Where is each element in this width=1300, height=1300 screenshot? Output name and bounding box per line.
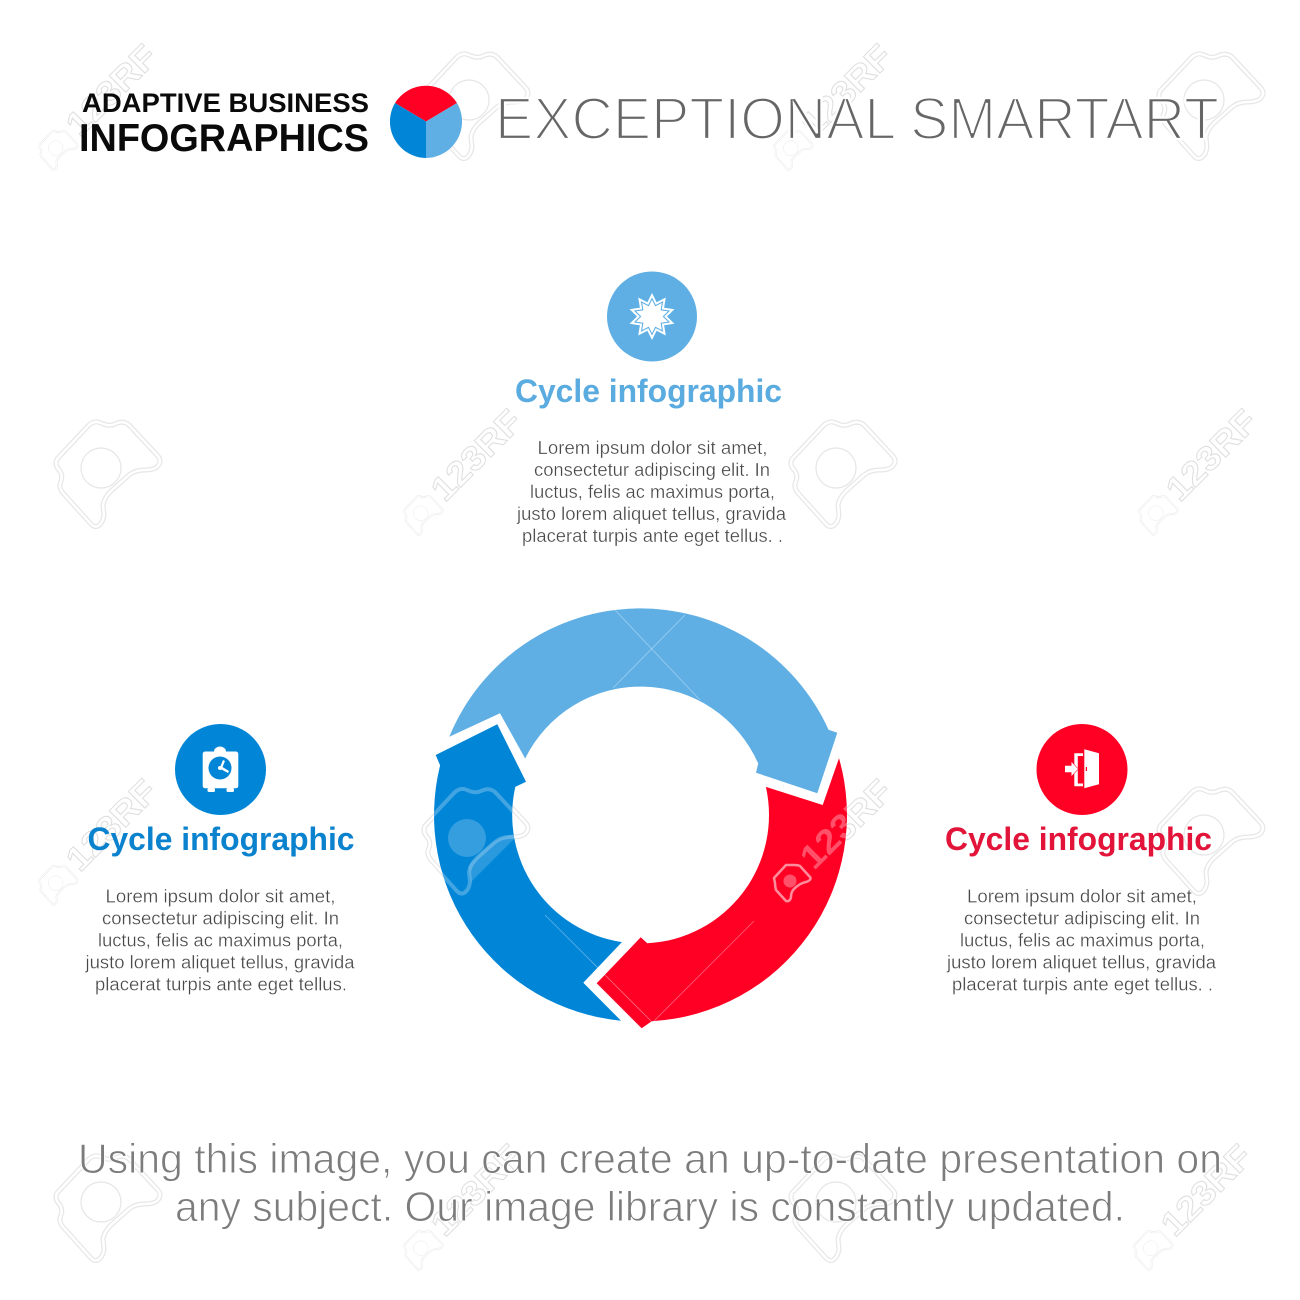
heading: top item: Cycle infographic: [515, 373, 782, 409]
text block: left item: [85, 886, 355, 994]
text block: left item: consectetur adipiscing elit. In: [102, 908, 339, 928]
icon: star badge: [607, 272, 697, 362]
text block: top item: luctus, felis ac maximus porta,: [530, 481, 775, 502]
footer text: any subject. Our image library is constantly updated.: [175, 1183, 1125, 1230]
background watermark pattern: 123RF: [1154, 1138, 1260, 1244]
background watermark pattern: 123RF: [794, 38, 900, 144]
panel: top item: [515, 272, 787, 546]
text block: right item: Lorem ipsum dolor sit amet,: [967, 886, 1197, 906]
text block: top item: [516, 437, 787, 546]
icon: header pie logo: [390, 86, 462, 158]
background watermark pattern: 123RF: [794, 773, 900, 879]
footer text: Using this image, you can create an up-to-date presentation on: [78, 1135, 1222, 1182]
header title: EXCEPTIONAL SMARTART: [495, 86, 1219, 152]
arrow: light blue segment: [449, 608, 837, 793]
text block: right item: placerat turpis ante eget tellus. .: [952, 974, 1213, 994]
background watermark pattern: 123RF: [59, 773, 165, 879]
header logotype: INFOGRAPHICS: [79, 117, 369, 160]
header logotype: [79, 88, 369, 160]
heading: left item: Cycle infographic: [88, 821, 354, 857]
icon: door badge: [1036, 724, 1128, 815]
text block: right item: luctus, felis ac maximus porta,: [960, 930, 1205, 950]
text block: left item: luctus, felis ac maximus porta,: [98, 930, 343, 950]
text block: right item: consectetur adipiscing elit. In: [964, 908, 1200, 928]
text block: right item: justo lorem aliquet tellus, gravida: [946, 952, 1217, 972]
watermark overlay on ring: [434, 610, 847, 1022]
text block: top item: consectetur adipiscing elit. In: [534, 459, 770, 480]
text block: top item: placerat turpis ante eget tellus. .: [522, 525, 783, 546]
background watermark pattern: 123RF: [1159, 403, 1265, 509]
panel: right item: [945, 724, 1217, 994]
arrow: red segment: [597, 758, 847, 1028]
watermark overlay on ring: 123RF: [793, 771, 899, 877]
text block: right item: [946, 886, 1217, 994]
cycle ring chart: [434, 608, 847, 1028]
text block: left item: placerat turpis ante eget tellus.: [95, 974, 347, 994]
arrow: dark blue segment: [434, 724, 622, 1021]
icon: safe badge: [175, 724, 266, 815]
background watermark pattern: 123RF: [424, 403, 530, 509]
text block: top item: justo lorem aliquet tellus, gravida: [516, 503, 787, 524]
footer text: [78, 1135, 1222, 1230]
background watermark pattern: 123RF: [59, 38, 165, 144]
background watermark pattern: 123RF: [424, 1138, 530, 1244]
text block: top item: Lorem ipsum dolor sit amet,: [538, 437, 768, 458]
text block: left item: justo lorem aliquet tellus, gravida: [85, 952, 355, 972]
text block: left item: Lorem ipsum dolor sit amet,: [106, 886, 336, 906]
panel: left item: [85, 724, 355, 994]
heading: right item: Cycle infographic: [945, 821, 1212, 857]
header logotype: ADAPTIVE BUSINESS: [82, 88, 369, 118]
